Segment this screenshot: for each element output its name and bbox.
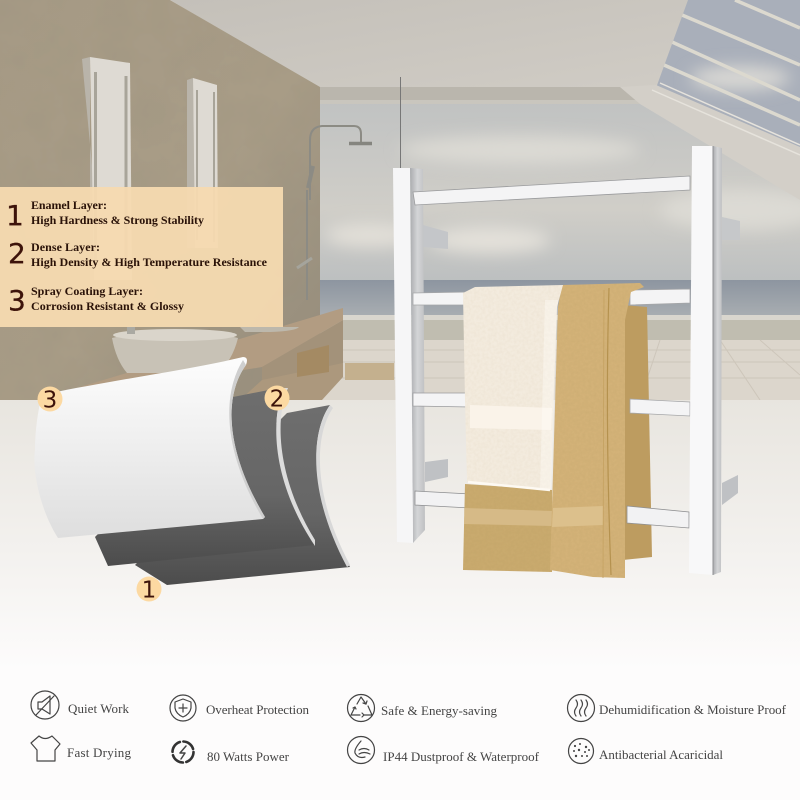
rails (413, 176, 690, 528)
wall (0, 0, 320, 400)
feature: antibacterial acaricidal: Antibacterial Acaricidal (599, 747, 723, 762)
spray coating layer text: 3 (8, 284, 26, 317)
dense layer text: Dense Layer: (31, 240, 100, 254)
ceiling (170, 0, 688, 104)
spray coating layer text: Spray Coating Layer: (31, 284, 143, 298)
background: bathroom scene (0, 0, 800, 626)
layer 1 sheet (135, 405, 350, 585)
back towel panel (622, 305, 652, 560)
tan bath towel, front fold (548, 282, 646, 582)
ceiling frame (620, 83, 800, 200)
right post (689, 146, 722, 575)
tan bath towel, back layer (463, 484, 555, 574)
wall brackets (423, 217, 740, 505)
feature: quiet work: Quiet Work (68, 701, 130, 716)
sky and clouds (320, 100, 800, 282)
feature: dehumidification and moisture proof (568, 694, 787, 722)
towel rack (393, 146, 740, 575)
dense layer text: 2 (8, 237, 26, 270)
left post (393, 168, 425, 543)
layer diagram (34, 357, 350, 604)
feature: antibacterial acaricidal (568, 738, 723, 764)
sea (320, 280, 800, 317)
feature: overheat protection (170, 695, 310, 721)
slatted mat (345, 363, 394, 380)
feature: 80 watts power: 80 Watts Power (207, 749, 290, 764)
feature: fast drying (31, 736, 132, 761)
feature: IP44 dustproof and waterproof (348, 736, 540, 764)
mirrors (82, 57, 218, 280)
skylight and slats (655, 0, 800, 150)
badge 3 (38, 386, 62, 414)
feature: 80 watts power (172, 742, 290, 764)
feature: safe and energy-saving: Safe & Energy-saving (381, 703, 498, 718)
dense layer text (8, 237, 268, 270)
panel: layer descriptions (0, 187, 283, 327)
enamel layer text: Enamel Layer: (31, 198, 107, 212)
terrace (320, 315, 800, 400)
layer 2 sheet (95, 387, 315, 566)
white towel (462, 284, 564, 492)
feature: dehumidification and moisture proof: Dehumidification & Moisture Proof (599, 702, 787, 717)
features list (31, 691, 787, 764)
shower (297, 126, 372, 300)
enamel layer text: 1 (6, 199, 24, 232)
under-counter alcove (262, 320, 343, 400)
feature: overheat protection: Overheat Protection (206, 702, 310, 717)
badge 1: 1 (142, 578, 156, 604)
badge 2 (264, 386, 290, 412)
feature: fast drying: Fast Drying (67, 745, 132, 760)
badge 2: 2 (270, 386, 284, 412)
feature: IP44 dustproof and waterproof: IP44 Dustproof & Waterproof (383, 749, 540, 764)
enamel layer text (6, 198, 204, 232)
feature: safe and energy-saving (348, 694, 498, 722)
enamel layer text: High Hardness & Strong Stability (31, 213, 204, 227)
vanity counter (60, 308, 343, 400)
sinks (112, 326, 299, 373)
feature: quiet work (31, 691, 130, 719)
layer 3 sheet (34, 357, 265, 538)
towels (462, 282, 646, 582)
floor fade (0, 400, 800, 670)
spray coating layer text (8, 284, 184, 317)
badge 1 (136, 576, 162, 604)
spray coating layer text: Corrosion Resistant & Glossy (31, 299, 184, 313)
badge 3: 3 (43, 388, 57, 414)
glass partition rod (400, 77, 401, 168)
dense layer text: High Density & High Temperature Resistance (31, 255, 268, 269)
